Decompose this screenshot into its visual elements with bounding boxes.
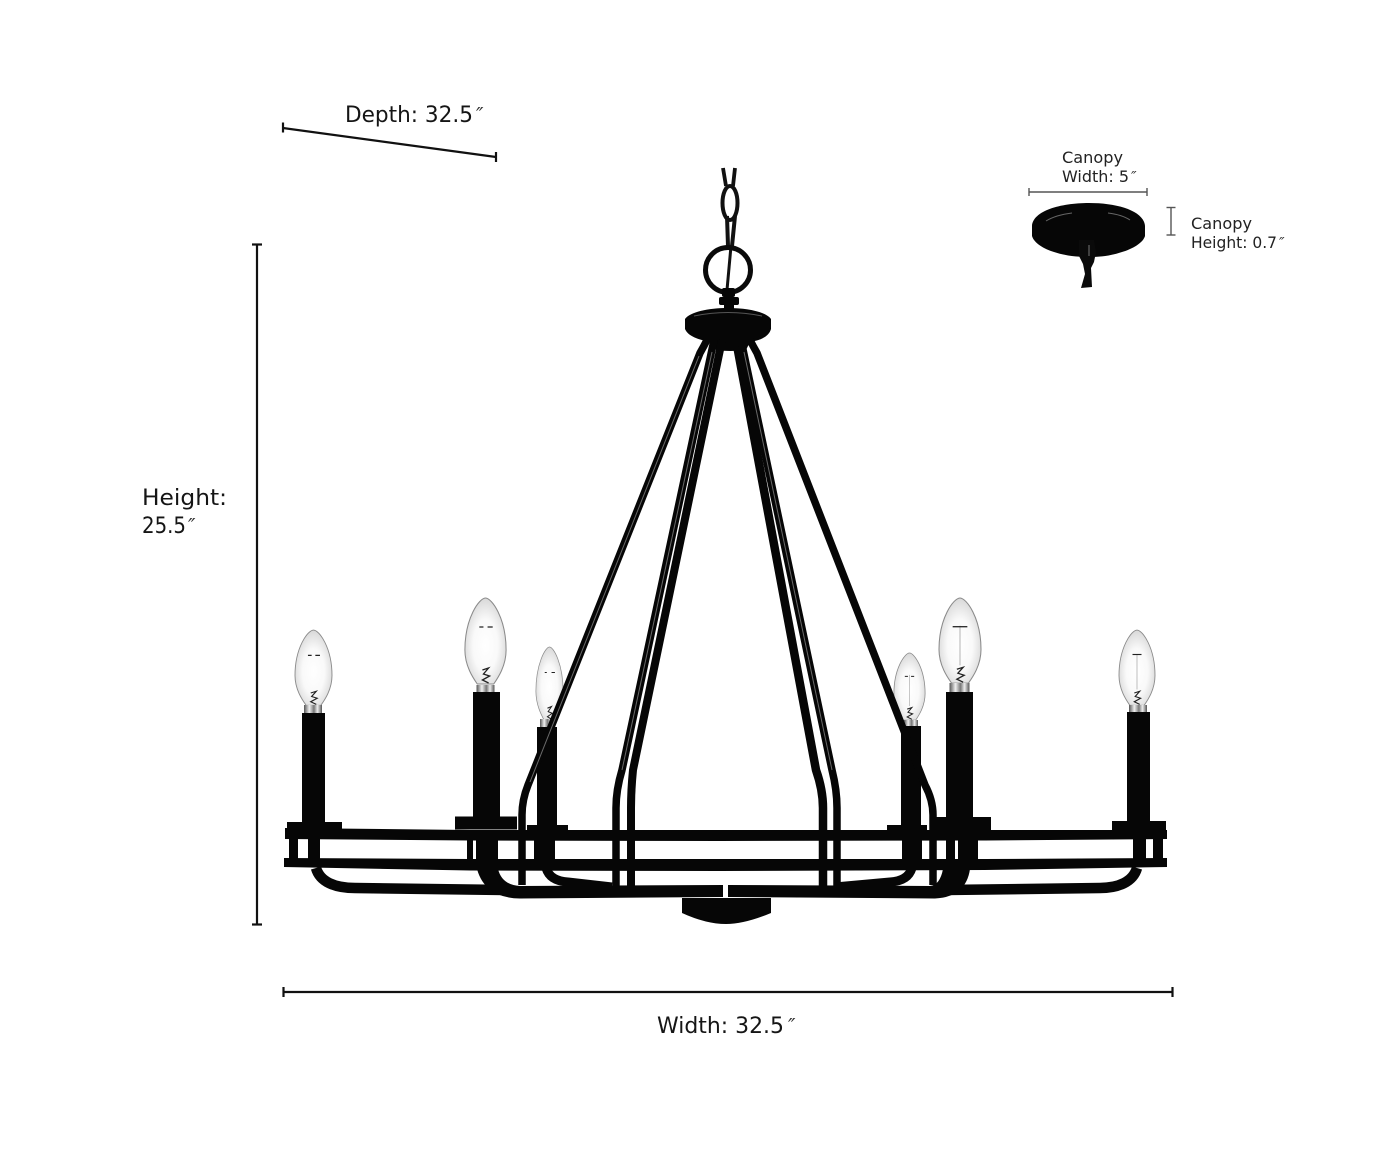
bulb: [894, 653, 925, 720]
bulb: [295, 630, 332, 705]
width dimension: [283, 987, 1173, 1039]
height line: [252, 244, 262, 925]
width prime mark: ″: [788, 1014, 796, 1038]
depth line: [283, 122, 496, 162]
bulb: [536, 647, 563, 720]
depth label: Depth: 32.5: [345, 102, 473, 128]
canopy detail: [1029, 148, 1285, 288]
chain: [722, 168, 738, 290]
ceiling cap: [685, 288, 771, 351]
bulb: [939, 598, 981, 683]
bulb: [465, 598, 506, 684]
right front candle: [1112, 630, 1166, 830]
chandelier: [284, 168, 1167, 924]
canopy height label: Canopy: [1191, 214, 1252, 233]
height value: 25.5: [142, 513, 186, 539]
lower curved arms: [316, 868, 1137, 898]
canopy height value: Height: 0.7: [1191, 233, 1277, 252]
short ring supports: [289, 838, 1163, 870]
bottom centre finial: [682, 898, 771, 924]
width line: [283, 987, 1173, 997]
depth prime mark: ″: [476, 103, 484, 127]
depth dimension: [283, 102, 496, 162]
back candle right: [835, 653, 927, 887]
width label: Width: 32.5: [657, 1013, 784, 1039]
canopy width value: Width: 5: [1062, 167, 1129, 186]
left tall candle: [455, 598, 517, 830]
bulb: [1119, 630, 1155, 705]
canopy width label: Canopy: [1062, 148, 1123, 167]
canopy height prime: ″: [1279, 234, 1285, 252]
canopy width line: [1029, 188, 1147, 196]
hanging ring: [706, 248, 750, 292]
back candle left: [527, 647, 612, 887]
left front candle: [287, 630, 342, 829]
height dimension: [142, 244, 262, 925]
canopy plate icon: [1032, 203, 1145, 288]
canopy height line: [1166, 207, 1176, 235]
support struts: [522, 340, 933, 886]
height label: Height:: [142, 485, 227, 511]
upper ring bar: [285, 828, 1167, 841]
right tall candle: [930, 598, 991, 830]
canopy width prime: ″: [1131, 168, 1137, 186]
lower ring bar: [284, 858, 1167, 871]
height prime mark: ″: [188, 514, 196, 538]
